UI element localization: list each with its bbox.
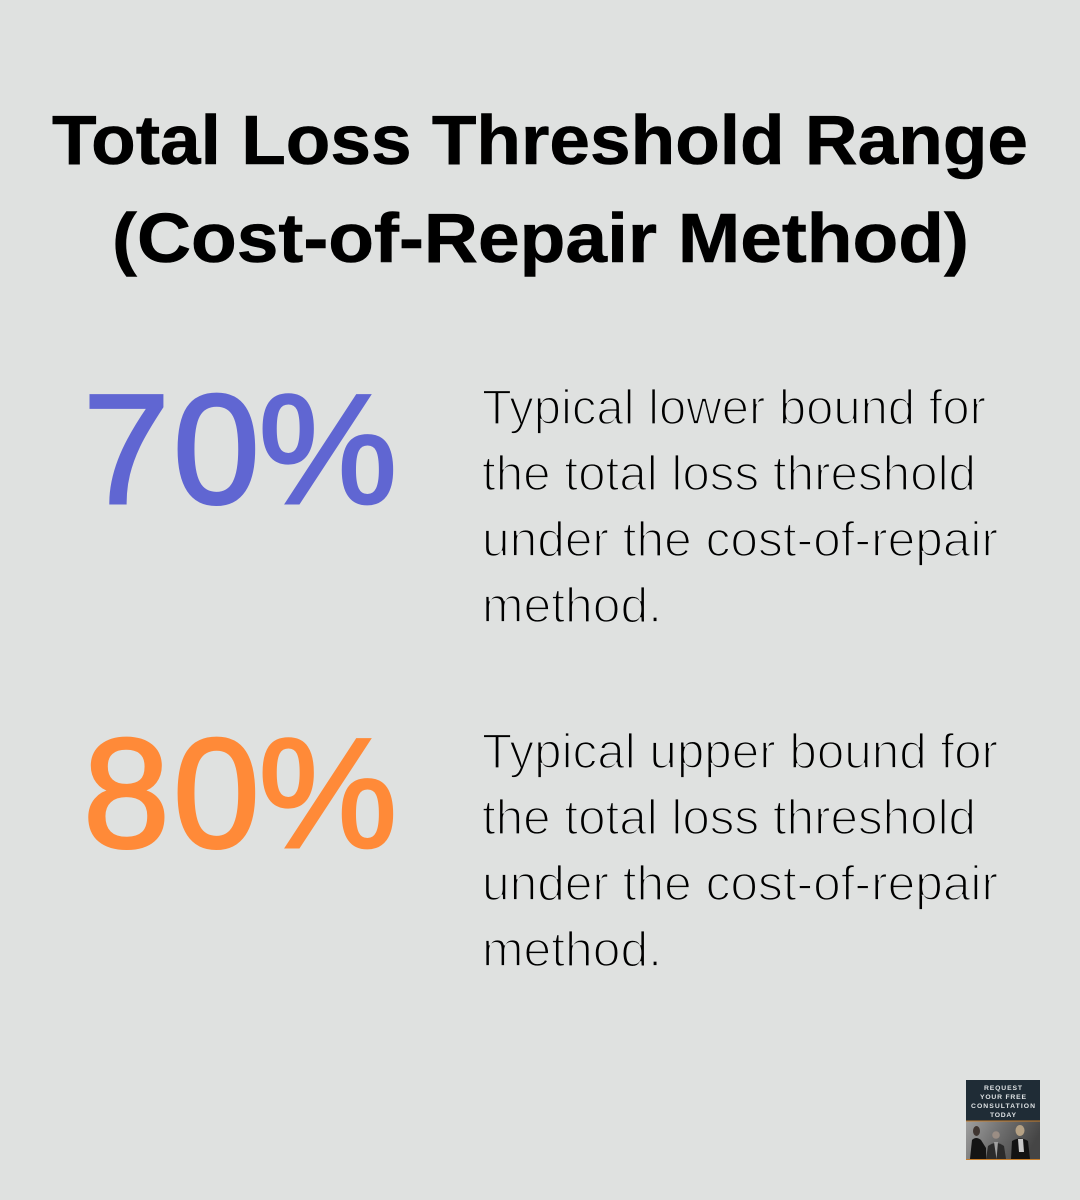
description: upper bound: Typical upper bound for <box>482 725 998 779</box>
description: lower bound: under the cost-of-repair <box>482 513 998 567</box>
badge text: CONSULTATION <box>971 1103 1035 1110</box>
number: 70%: 70% <box>83 363 397 537</box>
description: lower bound: Typical lower bound for <box>482 381 986 435</box>
title: Total Loss Threshold Range <box>52 101 1028 179</box>
description: lower bound <box>482 381 998 633</box>
description: lower bound: the total loss threshold <box>482 447 976 501</box>
stat: 80% upper bound <box>83 707 998 977</box>
title <box>52 101 1028 277</box>
number: 80%: 80% <box>83 707 397 881</box>
description: upper bound: method. <box>482 923 662 977</box>
description: upper bound: under the cost-of-repair <box>482 857 998 911</box>
badge text <box>971 1085 1035 1119</box>
description: upper bound: the total loss threshold <box>482 791 976 845</box>
badge text: TODAY <box>990 1112 1016 1119</box>
stat: 70% lower bound <box>83 363 998 633</box>
badge text: REQUEST <box>984 1085 1023 1092</box>
title: (Cost-of-Repair Method) <box>112 199 969 277</box>
description: lower bound: method. <box>482 579 662 633</box>
description: upper bound <box>482 725 998 977</box>
badge photo <box>966 1120 1040 1160</box>
consultation badge <box>966 1080 1040 1160</box>
badge text: YOUR FREE <box>980 1094 1026 1101</box>
